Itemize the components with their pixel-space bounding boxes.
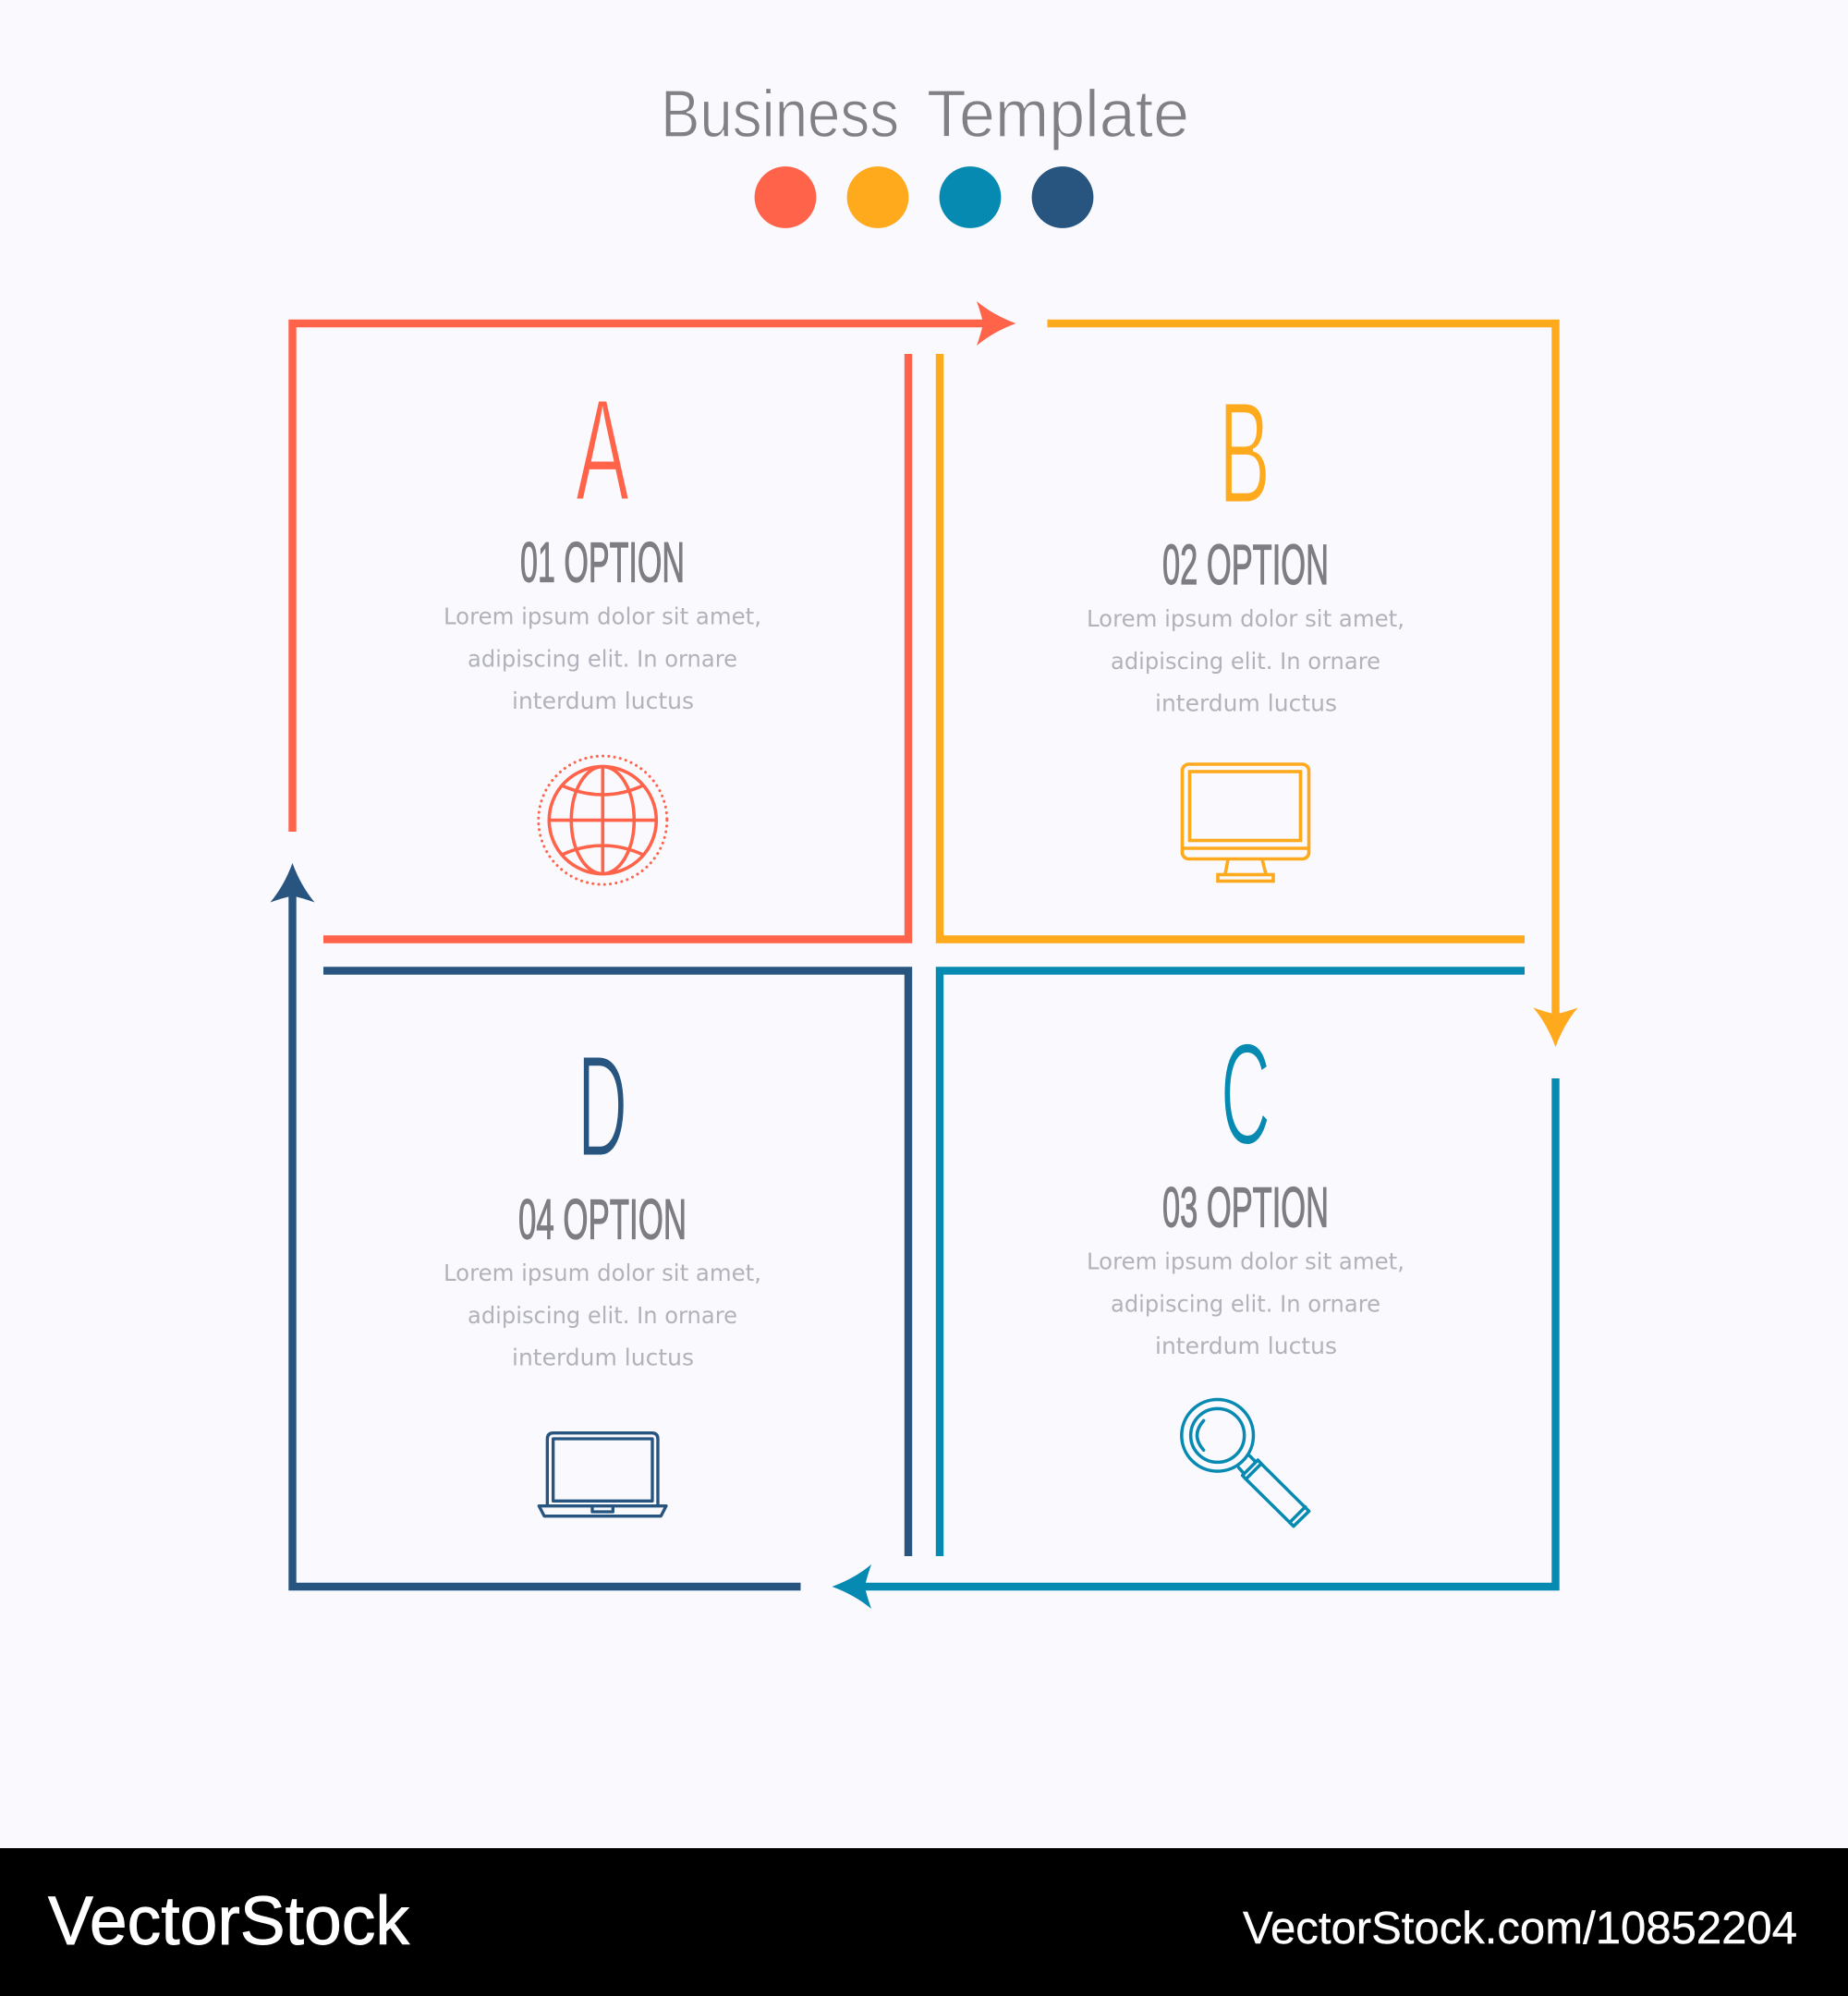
- body text: Lorem ipsum dolor sit amet,: [444, 602, 761, 630]
- panel B: orange: [940, 323, 1578, 1047]
- panel C: teal: [832, 970, 1556, 1609]
- body text: adipiscing elit. In ornare: [468, 1302, 737, 1329]
- heading 01 option: 01 OPTION: [520, 530, 685, 593]
- heading 02 option: 02 OPTION: [1162, 533, 1329, 596]
- orange frame with arrow: [940, 323, 1578, 1047]
- body text: interdum luctus: [512, 1344, 694, 1371]
- body text: adipiscing elit. In ornare: [468, 645, 737, 673]
- body text: interdum luctus: [512, 688, 694, 714]
- title: Template: [927, 78, 1189, 152]
- body text: Lorem ipsum dolor sit amet,: [1087, 1248, 1404, 1275]
- navy frame with arrow: [270, 863, 908, 1587]
- title: [661, 78, 1189, 152]
- colour dots legend: [755, 166, 1093, 228]
- body text: [1087, 605, 1404, 717]
- body text: [444, 1260, 761, 1371]
- body text: interdum luctus: [1155, 1333, 1337, 1359]
- heading 03 option: 03 OPTION: [1162, 1176, 1329, 1239]
- icon: laptop: [539, 1433, 666, 1516]
- footer brand: VectorStock: [48, 1882, 410, 1959]
- heading 04 option: 04 OPTION: [518, 1188, 687, 1251]
- body text: adipiscing elit. In ornare: [1111, 648, 1380, 675]
- title: Business: [661, 78, 899, 152]
- panel A: red: [292, 301, 1016, 939]
- icon: globe: [539, 756, 667, 884]
- body text: Lorem ipsum dolor sit amet,: [1087, 605, 1404, 632]
- body text: [444, 602, 761, 714]
- body text: interdum luctus: [1155, 689, 1337, 717]
- letter A: A: [576, 370, 629, 531]
- footer bar: [0, 1848, 1848, 1996]
- teal frame with arrow: [832, 970, 1556, 1609]
- footer url: VectorStock.com/10852204: [1243, 1903, 1797, 1953]
- red frame with arrow: [292, 301, 1016, 939]
- body text: [1087, 1248, 1404, 1359]
- body text: Lorem ipsum dolor sit amet,: [444, 1260, 761, 1286]
- panel D: navy: [270, 863, 908, 1587]
- letter B: B: [1219, 372, 1270, 534]
- body text: adipiscing elit. In ornare: [1111, 1291, 1380, 1318]
- icon: monitor: [1183, 764, 1308, 882]
- icon: magnifying glass: [1182, 1399, 1309, 1527]
- panel C: teal: C: [1221, 1014, 1270, 1175]
- panel D: navy: D: [578, 1026, 627, 1187]
